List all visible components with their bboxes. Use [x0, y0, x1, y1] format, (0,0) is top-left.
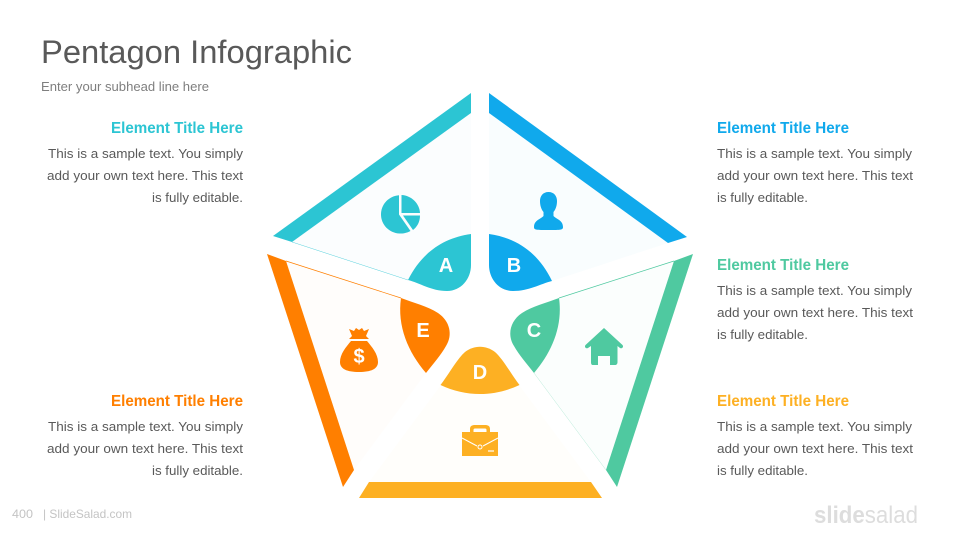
icon: money bag	[340, 328, 378, 372]
strip D	[359, 482, 602, 498]
text block A	[47, 120, 244, 205]
text block E: This is a sample text. You simply	[48, 419, 244, 434]
text block B: Element Title Here	[717, 120, 849, 137]
panel E: pentagon segment: E	[416, 320, 430, 342]
text block E: Element Title Here	[111, 393, 243, 410]
footer: page number and site: | SlideSalad.com	[43, 507, 132, 521]
strip A	[273, 93, 471, 242]
text block C: This is a sample text. You simply	[717, 283, 913, 298]
text block B: This is a sample text. You simply	[717, 146, 913, 161]
text block A: This is a sample text. You simply	[48, 146, 244, 161]
text block C	[717, 257, 913, 342]
text block A: is fully editable.	[152, 190, 243, 205]
subhead: Enter your subhead line here	[41, 79, 209, 94]
icon: pie chart	[381, 195, 420, 234]
badge C	[510, 298, 560, 373]
text block C: Element Title Here	[717, 257, 849, 274]
panel C: pentagon segment: C	[527, 320, 541, 342]
text block A: add your own text here. This text	[47, 168, 243, 183]
panel E: pentagon segment	[267, 254, 450, 487]
strip E	[267, 254, 354, 487]
badge E	[400, 298, 450, 373]
text block D: add your own text here. This text	[717, 441, 913, 456]
title: Pentagon Infographic	[41, 34, 352, 70]
text block C: is fully editable.	[717, 327, 808, 342]
strip B	[489, 93, 687, 243]
logo wordmark: slidesalad	[814, 502, 918, 529]
panel B: pentagon segment: B	[507, 255, 521, 277]
icon: money bag: $	[353, 346, 365, 368]
icon: house	[585, 328, 623, 365]
text block E	[47, 393, 244, 478]
icon: person	[534, 192, 563, 230]
text block D	[717, 393, 913, 478]
panel B: pentagon segment	[489, 93, 687, 291]
text block D: This is a sample text. You simply	[717, 419, 913, 434]
panel C: pentagon segment	[510, 254, 693, 487]
strip C	[606, 254, 693, 487]
panel A: pentagon segment	[273, 93, 471, 291]
text block A: Element Title Here	[111, 120, 243, 137]
badge D	[440, 347, 520, 394]
text block B: add your own text here. This text	[717, 168, 913, 183]
text block C: add your own text here. This text	[717, 305, 913, 320]
text block B	[717, 120, 913, 205]
text block B: is fully editable.	[717, 190, 808, 205]
badge B	[489, 234, 552, 291]
text block E: add your own text here. This text	[47, 441, 243, 456]
panel A: pentagon segment: A	[439, 255, 453, 277]
panel D: pentagon segment: D	[473, 362, 487, 384]
badge A	[408, 234, 471, 291]
panel D: pentagon segment	[359, 347, 602, 498]
text block D: is fully editable.	[717, 463, 808, 478]
footer: page number and site: 400	[12, 507, 33, 521]
text block D: Element Title Here	[717, 393, 849, 410]
text block E: is fully editable.	[152, 463, 243, 478]
icon: briefcase	[462, 425, 498, 456]
